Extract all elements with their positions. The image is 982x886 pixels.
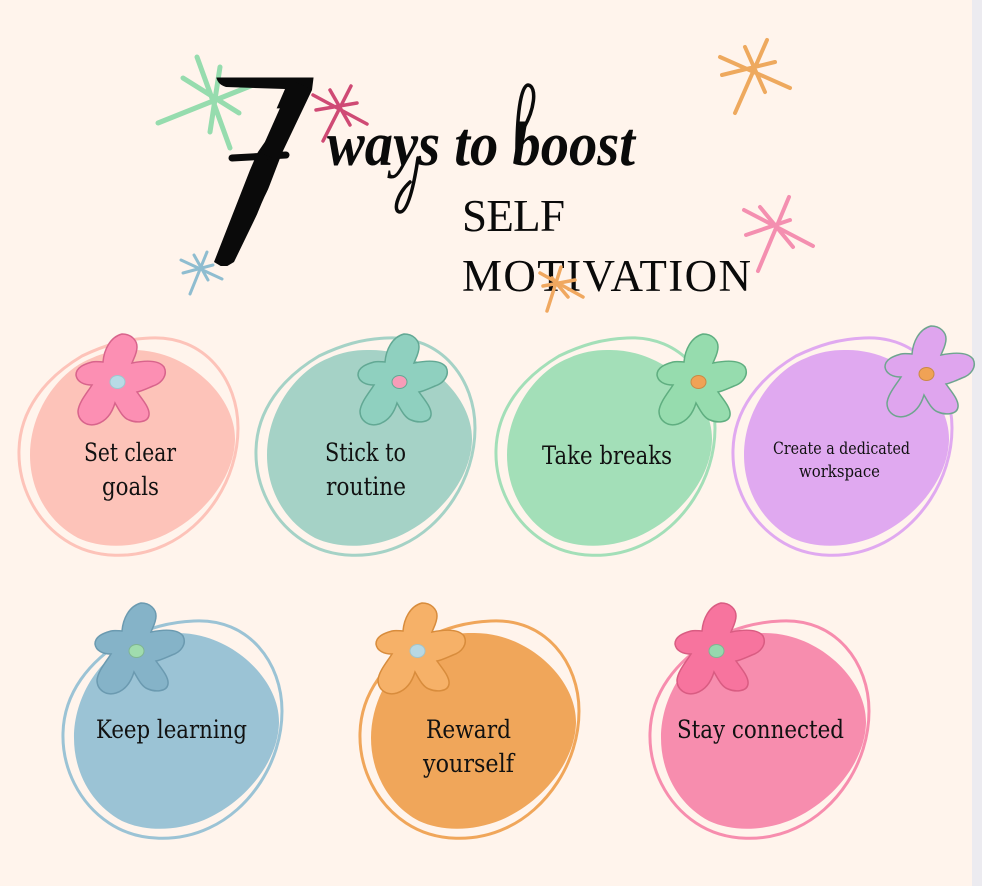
sparkle: blue	[181, 252, 222, 294]
ring	[256, 338, 475, 555]
card: Stay connected	[650, 603, 869, 838]
blob	[267, 350, 472, 546]
blob	[30, 350, 235, 546]
icon: flower	[885, 326, 974, 417]
ring	[63, 621, 282, 838]
ring	[360, 621, 579, 838]
label: Reward	[426, 715, 511, 744]
card: Reward yourself	[360, 603, 579, 838]
icon: flower	[76, 334, 165, 425]
label: goals	[102, 472, 159, 501]
card: Take breaks	[496, 334, 746, 555]
icon: flower	[95, 603, 184, 694]
title: SELF: SELF	[462, 191, 565, 241]
sparkle: green	[158, 57, 253, 148]
blob	[507, 350, 712, 546]
ring	[733, 338, 952, 555]
card: Create a dedicated workspace	[733, 326, 974, 555]
title numeral 7: 7	[192, 19, 328, 325]
label: Stay connected	[677, 715, 844, 744]
label: Stick to	[325, 438, 406, 467]
sparkle: crimson	[313, 86, 367, 141]
sparkle: orange top right	[720, 40, 790, 113]
blob	[661, 633, 866, 829]
label: Set clear	[84, 438, 176, 467]
label: yourself	[422, 749, 516, 778]
label: workspace	[799, 462, 880, 481]
title: ways to boost	[327, 85, 637, 212]
icon: flower	[376, 603, 465, 694]
icon: flower	[657, 334, 746, 425]
sparkle: orange over title	[540, 267, 583, 311]
card: Keep learning	[63, 603, 282, 838]
title: MOTIVATION: MOTIVATION	[462, 251, 751, 301]
label: Create a dedicated	[773, 439, 910, 458]
title numeral 7	[214, 78, 314, 266]
ring	[19, 338, 238, 555]
label: Keep learning	[96, 715, 247, 744]
label: Take breaks	[542, 441, 672, 470]
card: Set clear goals	[19, 334, 238, 555]
card: Stick to routine	[256, 334, 475, 555]
sparkle: pink right	[744, 197, 813, 271]
icon: flower	[675, 603, 764, 694]
icon: flower	[358, 334, 447, 425]
ring	[496, 338, 715, 555]
label: routine	[326, 472, 406, 501]
blob	[371, 633, 576, 829]
blob	[74, 633, 279, 829]
ring	[650, 621, 869, 838]
title: ways to boost: ways to boost	[327, 111, 637, 179]
blob	[744, 350, 949, 546]
